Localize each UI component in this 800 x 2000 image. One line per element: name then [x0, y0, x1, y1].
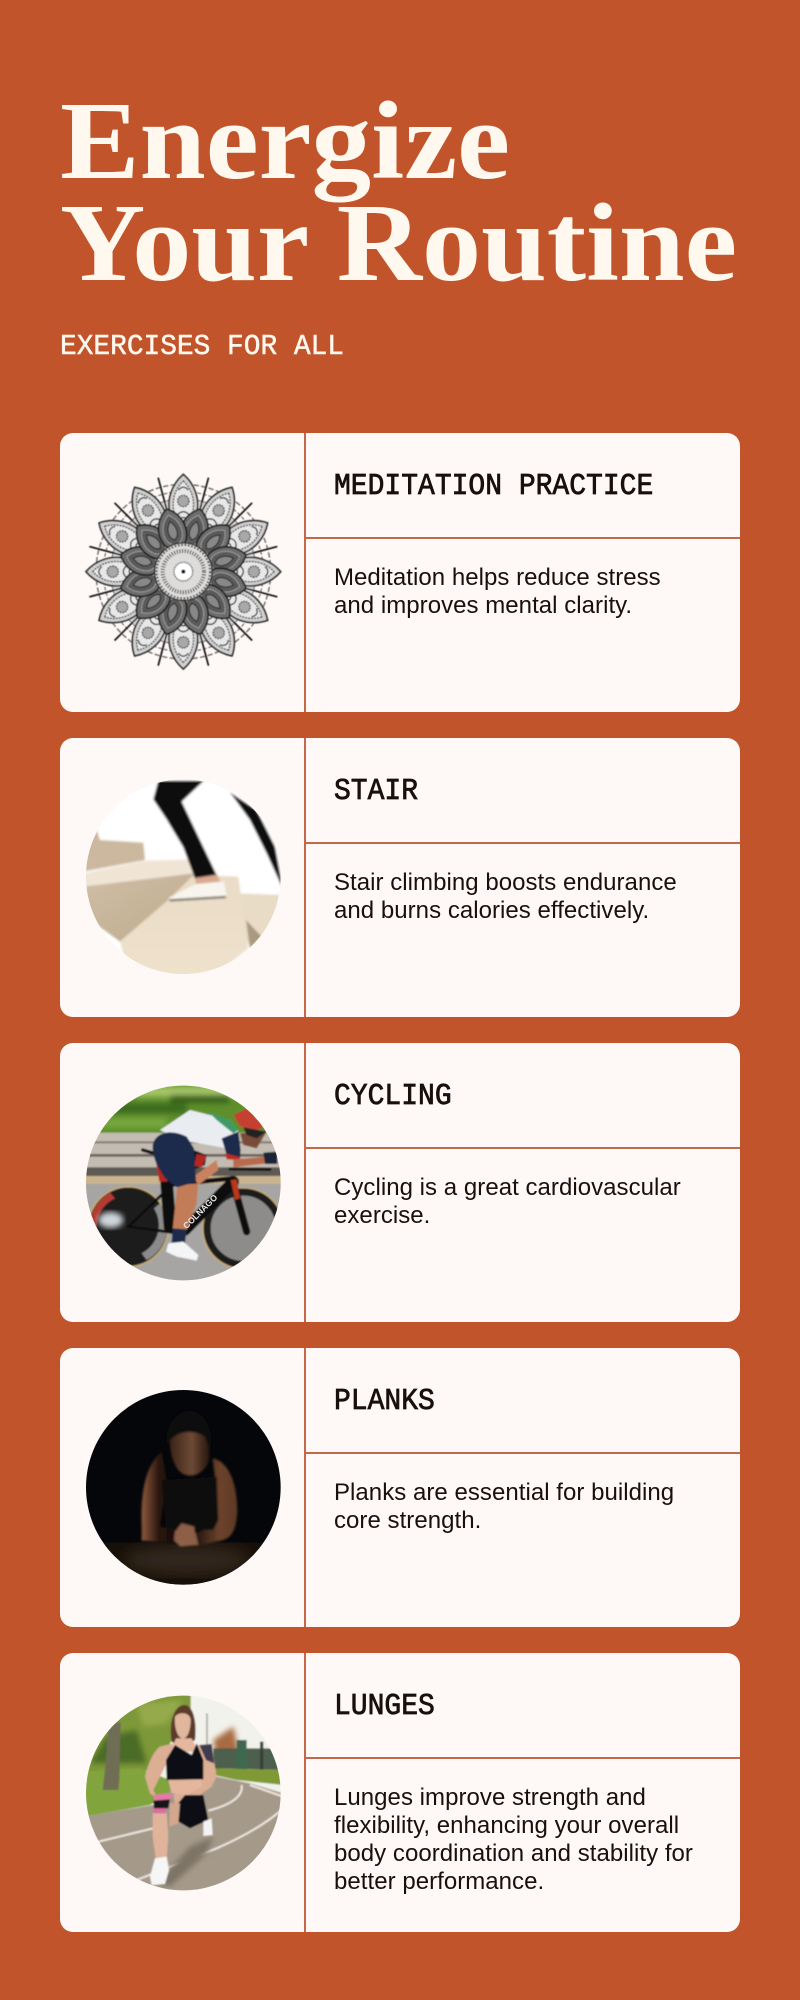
- description: and burns calories effectively.: [334, 897, 649, 924]
- photo: cyclist: [86, 1086, 281, 1280]
- description: [334, 1784, 693, 1895]
- description: Stair climbing boosts endurance: [334, 869, 677, 896]
- description: Planks are essential for building: [334, 1479, 674, 1506]
- description: and improves mental clarity.: [334, 592, 632, 619]
- panel: cycling: [60, 1043, 740, 1322]
- description: Cycling is a great cardiovascular: [334, 1174, 681, 1201]
- description: [334, 1174, 681, 1229]
- title: Energize: [60, 80, 510, 203]
- description: flexibility, enhancing your overall: [334, 1812, 679, 1839]
- photo: stair climbing: [86, 780, 281, 974]
- description: Meditation helps reduce stress: [334, 564, 661, 591]
- icon: mandala: [84, 472, 282, 671]
- heading: PLANKS: [334, 1385, 435, 1419]
- description: [334, 1479, 674, 1534]
- panel: meditation practice: [60, 433, 740, 712]
- photo: cyclist: COLNAGO: [181, 1192, 220, 1231]
- panel: stair: [60, 738, 740, 1017]
- heading: MEDITATION PRACTICE: [334, 470, 653, 504]
- panel: lunges: [60, 1653, 740, 1932]
- description: core strength.: [334, 1507, 481, 1534]
- heading: CYCLING: [334, 1080, 452, 1114]
- title: Your Routine: [60, 182, 737, 305]
- photo: lunge pose: [86, 1696, 281, 1890]
- description: [334, 564, 661, 619]
- title: [60, 80, 737, 305]
- description: body coordination and stability for: [334, 1840, 693, 1867]
- description: better performance.: [334, 1868, 544, 1895]
- photo: plank pose: [86, 1390, 281, 1585]
- panel: planks: [60, 1348, 740, 1627]
- heading: LUNGES: [334, 1690, 435, 1724]
- description: Lunges improve strength and: [334, 1784, 646, 1811]
- description: [334, 869, 677, 924]
- heading: STAIR: [334, 775, 418, 809]
- subtitle: EXERCISES FOR ALL: [60, 330, 344, 363]
- description: exercise.: [334, 1202, 430, 1229]
